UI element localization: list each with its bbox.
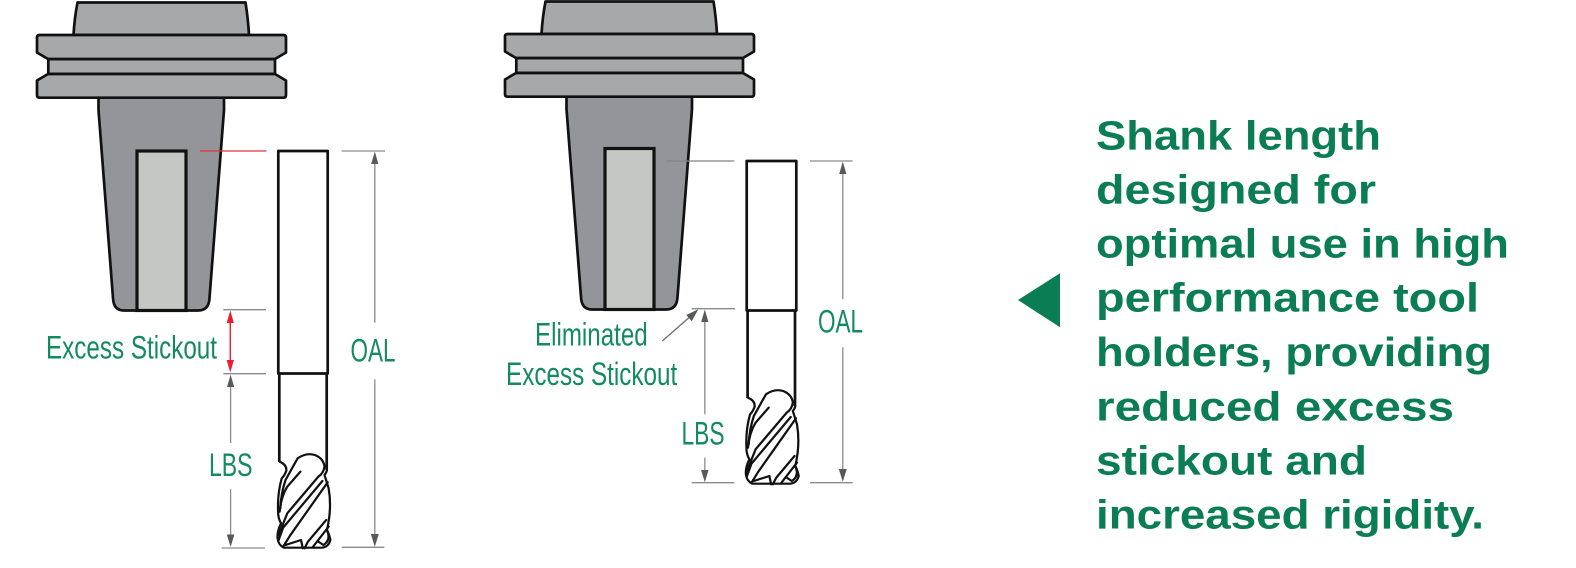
grey reference line bbox=[667, 160, 734, 162]
text block: shank length statement: performance tool bbox=[1096, 275, 1479, 321]
text block: shank length statement: designed for bbox=[1096, 166, 1376, 212]
label: OAL: OAL bbox=[350, 333, 396, 369]
dimension: LBS bbox=[682, 309, 735, 483]
panel: diagram with eliminated excess stickout bbox=[505, 2, 863, 484]
tool holder bbox=[37, 2, 286, 310]
label: eliminated excess stickout: Eliminated bbox=[535, 317, 648, 353]
text block: shank length statement bbox=[1096, 112, 1509, 537]
dimension: LBS bbox=[209, 375, 265, 548]
text block: shank length statement: holders, providing bbox=[1096, 329, 1492, 375]
label: LBS: LBS bbox=[209, 447, 252, 483]
callout: eliminated excess stickout bbox=[506, 309, 698, 392]
red reference line bbox=[200, 150, 266, 152]
text block: shank length statement: stickout and bbox=[1096, 438, 1367, 484]
tool holder bbox=[505, 2, 754, 310]
dimension: OAL bbox=[342, 151, 396, 547]
dimension: excess stickout bbox=[46, 310, 266, 374]
label: eliminated excess stickout: Excess Stickout bbox=[506, 356, 677, 392]
end mill bbox=[746, 161, 799, 484]
label: OAL: OAL bbox=[818, 304, 863, 340]
text block: shank length statement: optimal use in high bbox=[1096, 220, 1509, 266]
label: excess stickout: Excess Stickout bbox=[46, 329, 217, 365]
icon: pointer triangle bbox=[1018, 273, 1060, 327]
panel: diagram with excess stickout bbox=[37, 2, 396, 548]
text block: shank length statement: increased rigidity. bbox=[1096, 491, 1484, 537]
text block: shank length statement: reduced excess bbox=[1096, 383, 1454, 429]
dimension: OAL bbox=[810, 161, 863, 483]
end mill bbox=[277, 151, 330, 548]
text block: shank length statement: Shank length bbox=[1096, 112, 1381, 158]
label: LBS: LBS bbox=[682, 415, 724, 451]
